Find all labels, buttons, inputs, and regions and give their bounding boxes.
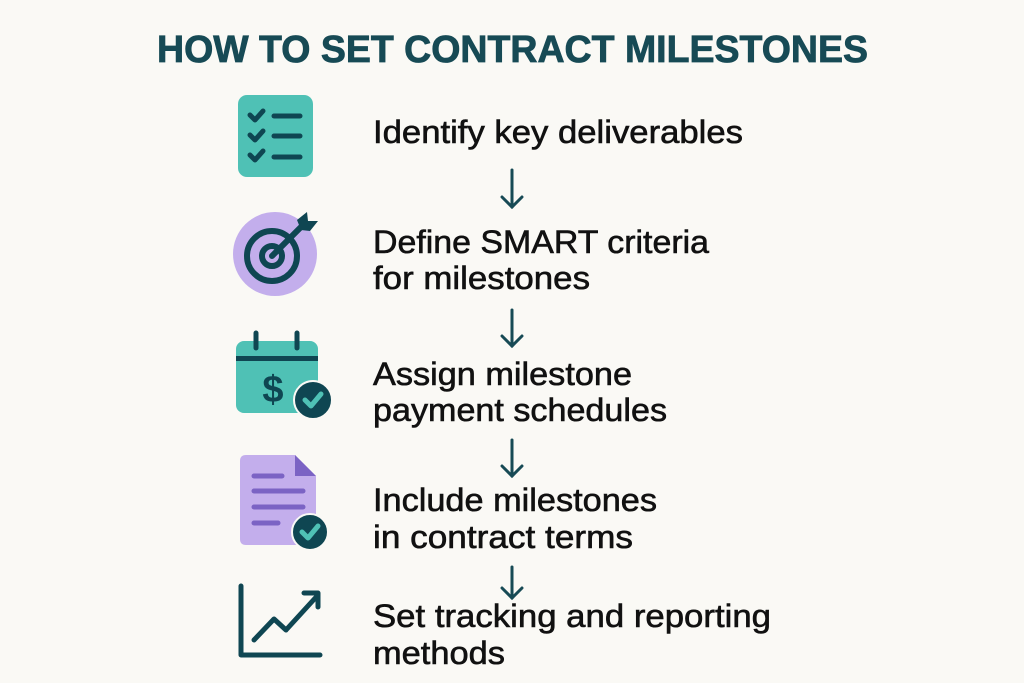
icon: checklist	[238, 95, 313, 177]
step 5 text	[373, 598, 771, 671]
step 5 text: Set tracking and reporting	[373, 598, 771, 634]
arrow 3	[502, 440, 522, 476]
step 4 text	[373, 482, 657, 555]
step 3 text	[373, 356, 667, 428]
step 4 text: Include milestones	[373, 482, 657, 518]
step 3 text: Assign milestone	[373, 356, 632, 392]
step 2 text	[373, 224, 709, 296]
icon: growth chart	[241, 586, 320, 655]
step 5 text: methods	[373, 635, 505, 671]
step 2 text: for milestones	[373, 260, 590, 296]
icon: document check	[240, 455, 328, 550]
arrow 2	[502, 310, 522, 346]
icon: calendar payment	[236, 333, 332, 419]
title: HOW TO SET CONTRACT MILESTONES	[157, 29, 868, 71]
step 4 text: in contract terms	[373, 519, 633, 555]
icon: target	[233, 212, 318, 296]
step 1 text: Identify key deliverables	[373, 114, 743, 150]
arrow 4	[502, 567, 522, 598]
step 2 text: Define SMART criteria	[373, 224, 709, 260]
icon: calendar payment: $	[262, 369, 284, 411]
arrow 1	[502, 170, 522, 207]
step 3 text: payment schedules	[373, 392, 667, 428]
